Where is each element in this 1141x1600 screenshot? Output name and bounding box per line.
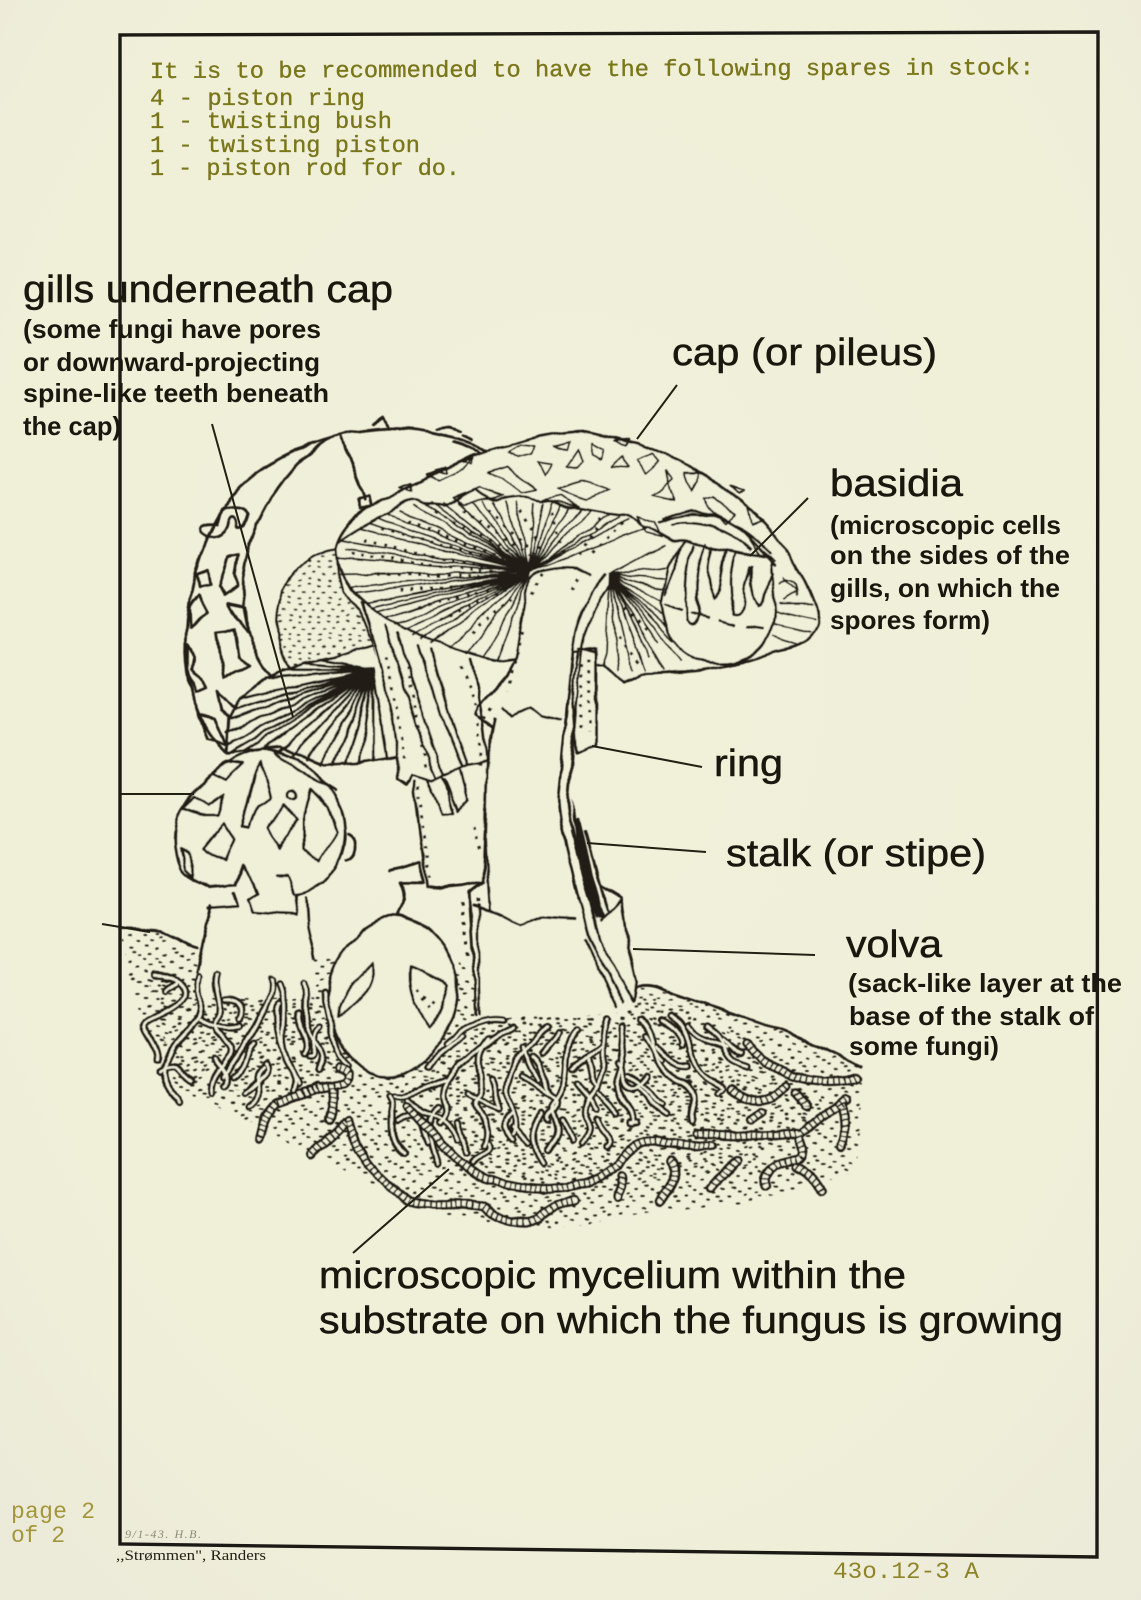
label: gills underneath cap: or downward-projecting <box>23 347 320 377</box>
illustration: mushrooms and mycelium <box>120 417 861 1230</box>
typed note: spares in stock: 1 - twisting bush <box>150 109 392 135</box>
label: basidia: gills, on which the <box>830 573 1060 603</box>
mycelium roots <box>144 973 856 1223</box>
back mushroom <box>186 417 494 1014</box>
leader line: basidia <box>750 498 808 556</box>
label: basidia: spores form) <box>830 605 990 635</box>
main mushroom <box>335 431 819 1018</box>
leader line: mycelium <box>353 1169 449 1253</box>
young cap <box>175 749 355 915</box>
handwritten date note: 9/1-43. H.B. <box>125 1527 201 1541</box>
leader line: soil <box>102 924 150 932</box>
label: gills underneath cap: gills underneath cap <box>23 269 393 311</box>
egg and roots <box>144 915 856 1223</box>
typed note: spares in stock: 1 - twisting piston <box>150 133 420 159</box>
typed note: spares in stock: 1 - piston rod for do. <box>150 156 460 182</box>
label: ring: ring <box>714 743 783 785</box>
middle stalk <box>362 603 487 1014</box>
label: microscopic mycelium <box>319 1255 1063 1342</box>
label: volva: volva <box>846 924 943 966</box>
label: volva: (sack-like layer at the <box>848 968 1122 998</box>
leader line: cap <box>637 385 677 439</box>
back cap <box>186 417 494 753</box>
back gill fan <box>226 645 398 765</box>
label: volva: some fungi) <box>849 1031 999 1061</box>
leader line: ring <box>592 746 702 767</box>
young stem base <box>197 898 315 998</box>
label: basidia <box>830 463 1070 635</box>
leader line: gills <box>212 424 293 717</box>
main cap <box>335 431 819 682</box>
label: gills underneath cap: spine-like teeth beneath <box>23 378 329 408</box>
typed note: spares in stock <box>150 55 1034 182</box>
label: microscopic mycelium: substrate on which the fungus is growing <box>319 1300 1063 1342</box>
label: microscopic mycelium: microscopic mycelium within the <box>319 1255 906 1297</box>
leader line: young cap <box>120 793 194 795</box>
document number: 43o.12-3 A <box>833 1559 979 1585</box>
soil stipple <box>120 928 861 1230</box>
label: basidia: (microscopic cells <box>830 510 1061 540</box>
gills <box>337 502 646 659</box>
page number <box>11 1499 95 1549</box>
label: stalk (or stipe): stalk (or stipe) <box>726 833 986 875</box>
page number: page 2 <box>11 1499 95 1525</box>
spotted inner cap <box>277 549 373 670</box>
label: gills underneath cap: the cap) <box>23 411 121 441</box>
label: cap (or pileus): cap (or pileus) <box>672 332 937 374</box>
basidia inset <box>659 511 815 664</box>
typed note: spares in stock: 4 - piston ring <box>150 86 365 112</box>
typed note: spares in stock: It is to be recommended to have the following spares in stock: <box>150 55 1034 85</box>
printer credit: ,,Strømmen", Randers <box>116 1548 266 1564</box>
label: basidia: basidia <box>830 463 964 505</box>
label: volva: base of the stalk of <box>849 1001 1094 1031</box>
leader line: stalk <box>587 843 706 852</box>
label: volva <box>846 924 1122 1061</box>
page number: of 2 <box>11 1523 65 1549</box>
leader line: volva <box>633 949 815 955</box>
mycelium strands <box>259 1043 856 1223</box>
young button mushroom <box>175 749 355 998</box>
label: basidia: on the sides of the <box>830 540 1070 570</box>
egg stage button <box>328 915 457 1077</box>
label: gills underneath cap <box>23 269 393 441</box>
label: gills underneath cap: (some fungi have pores <box>23 314 321 344</box>
stalk with ring and volva <box>474 568 637 1018</box>
